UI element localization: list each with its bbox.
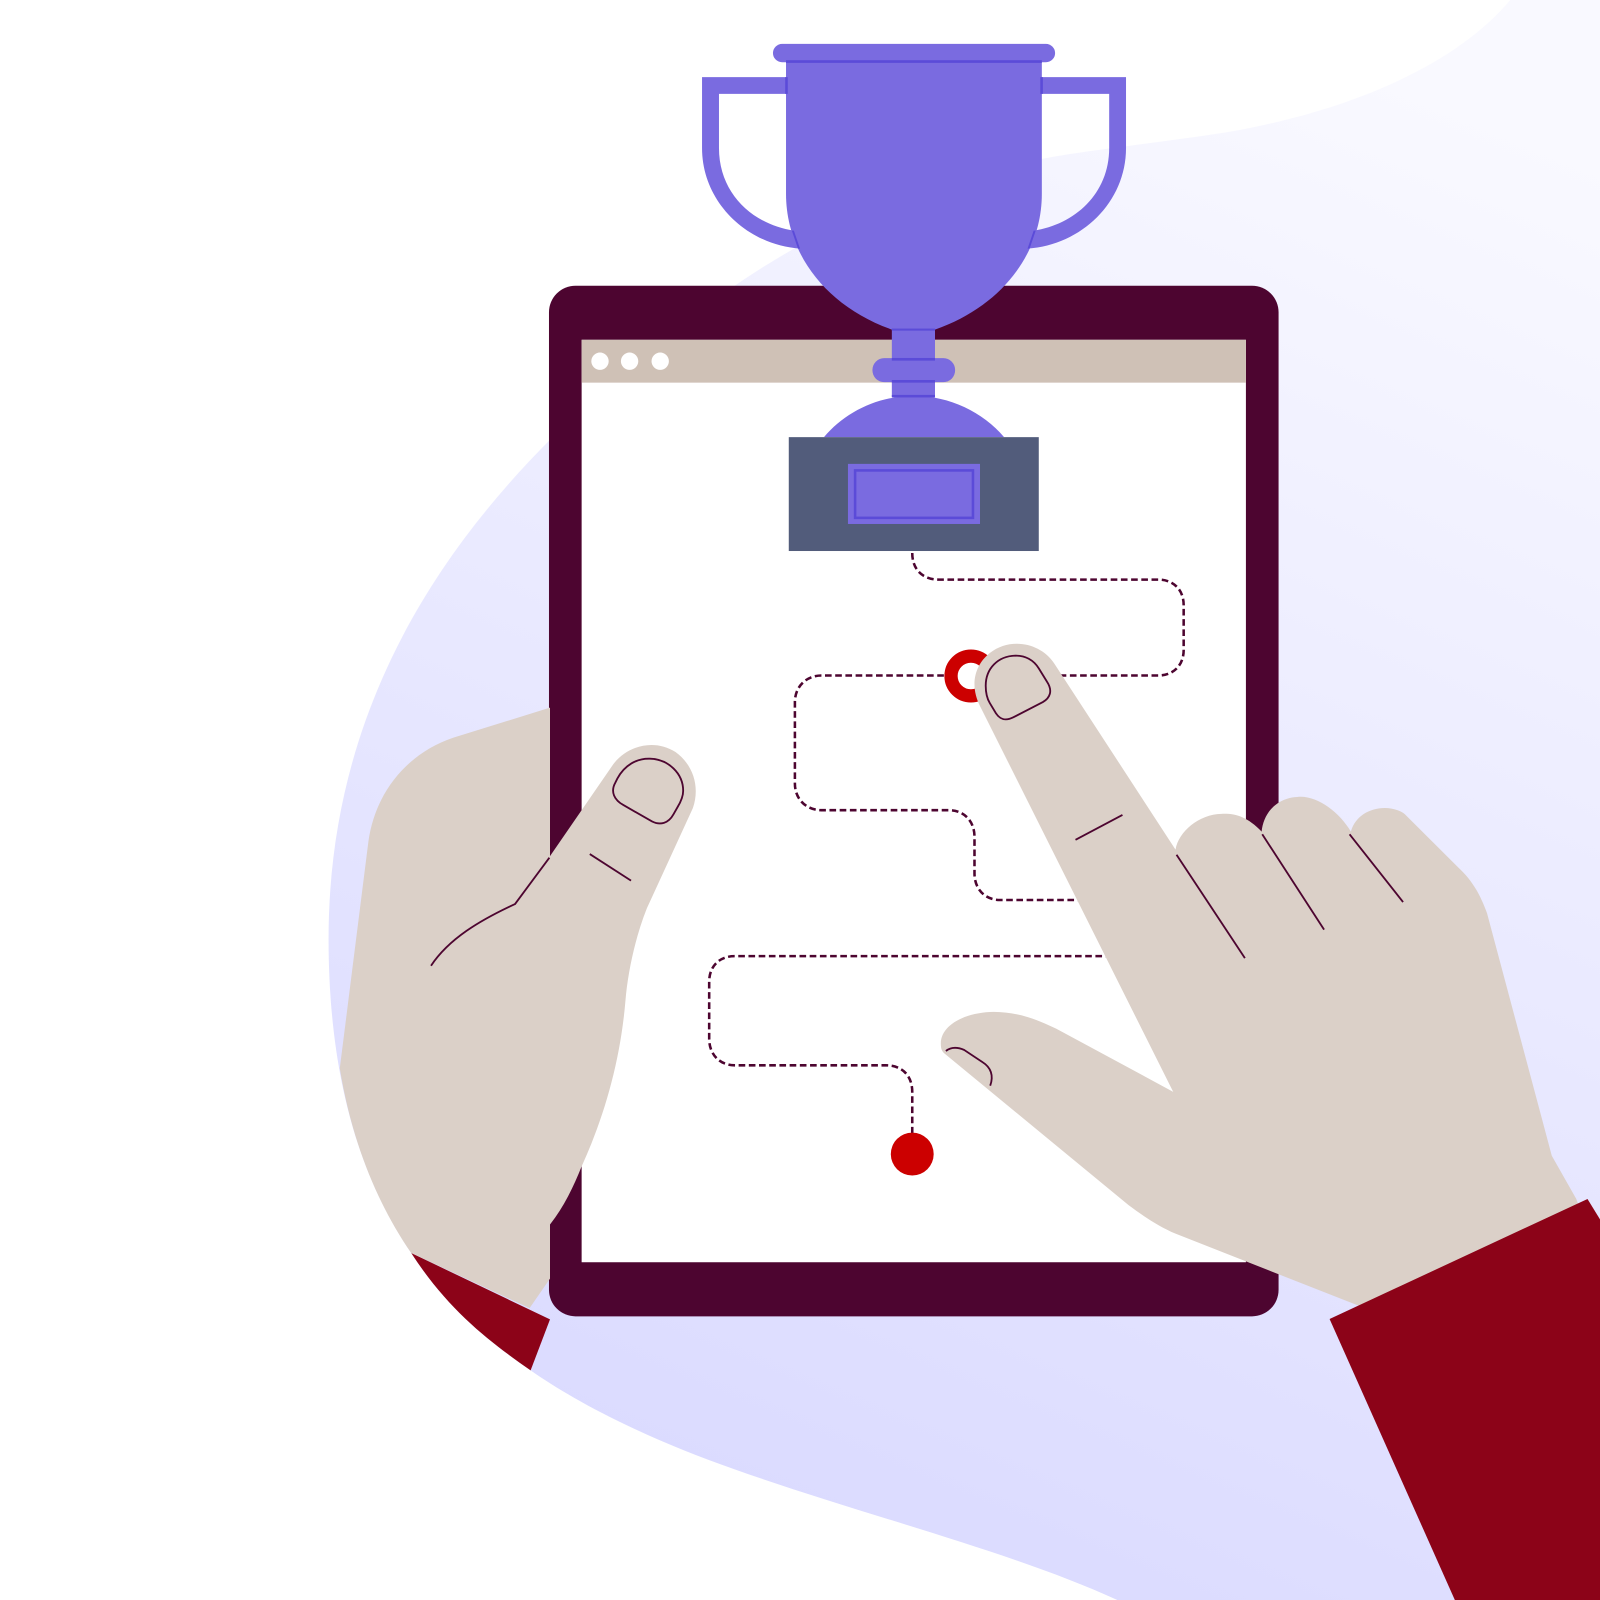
handle joints bbox=[785, 77, 1043, 249]
left sleeve bbox=[411, 1253, 550, 1370]
trophy rim bbox=[773, 44, 1055, 62]
tablet screen bbox=[582, 340, 1246, 1262]
start marker bbox=[891, 1133, 934, 1176]
name plate bbox=[848, 464, 980, 524]
trophy stem bbox=[892, 329, 935, 397]
thumb nail bbox=[613, 759, 683, 823]
tablet bbox=[549, 286, 1279, 1316]
background blob bbox=[329, 0, 1600, 1600]
trophy right handle bbox=[1028, 77, 1126, 249]
index finger joint line bbox=[1076, 815, 1122, 840]
trophy plinth bbox=[789, 437, 1039, 551]
right thumb nail bbox=[946, 1048, 992, 1086]
left hand bbox=[340, 708, 696, 1308]
dashed game path bbox=[709, 553, 1184, 1135]
trophy cup bbox=[786, 61, 1042, 330]
stem bands bbox=[892, 329, 935, 383]
tablet frame bbox=[549, 286, 1279, 1316]
right hand bbox=[941, 644, 1582, 1306]
knuckle lines bbox=[1177, 834, 1403, 958]
left palm and thumb bbox=[340, 708, 696, 1308]
trophy bbox=[702, 44, 1126, 551]
thumb joint line bbox=[590, 854, 631, 881]
index finger nail bbox=[986, 656, 1050, 719]
trophy knob bbox=[872, 358, 955, 382]
trophy base dome bbox=[824, 396, 1004, 437]
trophy left handle bbox=[702, 77, 800, 249]
right sleeve bbox=[1330, 1199, 1600, 1600]
current position ring bbox=[951, 656, 991, 696]
right hand shape bbox=[941, 644, 1582, 1306]
palm crease bbox=[431, 858, 549, 966]
browser title bar bbox=[582, 340, 1246, 383]
